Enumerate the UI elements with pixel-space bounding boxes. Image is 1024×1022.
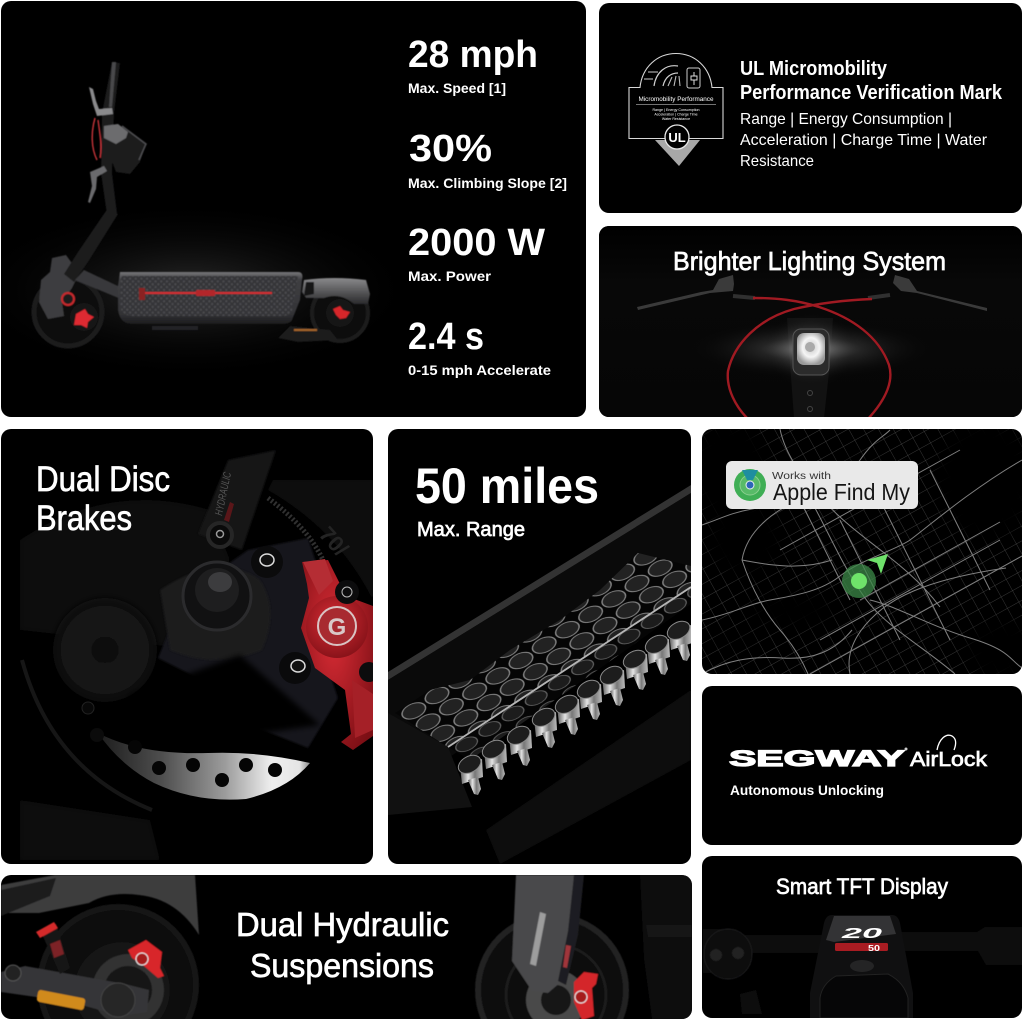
illustration: caliper mount xyxy=(158,538,338,748)
heading: smart TFT display: Smart TFT Display xyxy=(776,874,948,899)
illustration: side view of scooter xyxy=(34,62,370,346)
illustration: disc rotor xyxy=(82,702,310,800)
panel: dual disc brakes: HYDRAULIC xyxy=(213,471,234,517)
illustration: dark shadow over rotor xyxy=(189,654,318,733)
heading: dual disc brakes xyxy=(36,460,170,538)
heading: UL Micromobility: Performance Verification Mark xyxy=(740,82,1003,104)
heading: dual hydraulic suspensions xyxy=(236,906,449,984)
heading: dual hydraulic suspensions: Suspensions xyxy=(250,947,434,984)
front fork xyxy=(39,255,79,319)
badge: works with Apple Find My xyxy=(726,461,918,509)
logo: SEGWAY AirLock: SEGWAY xyxy=(729,746,906,771)
panel: battery range xyxy=(388,429,693,864)
rear wheel xyxy=(312,285,368,341)
panel: dual disc brakes xyxy=(1,429,379,864)
deck underside xyxy=(152,326,198,330)
text: autonomous unlocking: Autonomous Unlocking xyxy=(730,782,884,798)
icon: Find My xyxy=(734,469,766,501)
illustration: red range bar xyxy=(835,943,888,953)
heading: UL Micromobility xyxy=(740,58,1003,104)
icon: direction arrow xyxy=(867,554,888,574)
brake levers xyxy=(89,87,113,116)
heading: dual disc brakes: Brakes xyxy=(36,499,132,538)
illustration: tyre xyxy=(268,480,373,600)
text: verified metrics xyxy=(740,111,988,170)
illustration: bolts xyxy=(251,546,311,684)
illustration: speed readout: 20 xyxy=(840,925,884,942)
illustration: background swingarm xyxy=(20,500,230,650)
illustration: battery cells middle row xyxy=(448,588,691,760)
basket bracket xyxy=(112,128,146,174)
icon: UL badge: Water Resistance xyxy=(662,117,690,121)
illustration: red brake cables xyxy=(728,298,890,420)
stat: acceleration: 0-15 mph Accelerate xyxy=(408,362,551,378)
illustration: light glow xyxy=(728,330,894,368)
heading: brighter lighting system: Brighter Lighting System xyxy=(673,246,946,276)
illustration: front row of cells xyxy=(455,618,693,795)
illustration: battery cells upper rows xyxy=(395,553,691,747)
heading: 50 miles range: 50 miles xyxy=(415,458,599,514)
icon: UL badge: Micromobility Performance xyxy=(638,96,714,103)
red deck line xyxy=(143,292,272,294)
logo: SEGWAY AirLock: AirLock xyxy=(910,749,988,771)
front wheel xyxy=(34,278,102,346)
illustration: red range bar: 50 xyxy=(868,944,881,953)
illustration: fork leg xyxy=(198,450,276,550)
illustration: disc outer arc xyxy=(22,660,152,810)
stat: climbing slope: Max. Climbing Slope [2] xyxy=(408,175,567,191)
panel: dual disc brakes: 70/ xyxy=(314,522,353,561)
stem upper xyxy=(101,62,120,215)
panel: Apple Find My map xyxy=(690,420,1024,680)
logo: SEGWAY AirLock xyxy=(729,735,988,771)
panel: brighter lighting xyxy=(599,226,1022,420)
illustration: rear wheel xyxy=(1,875,199,1022)
illustration: brake levers xyxy=(637,275,987,311)
heading: 50 miles range xyxy=(415,458,599,541)
text: verified metrics: Acceleration | Charge Time | Water xyxy=(740,132,988,149)
stat: max speed: 28 mph xyxy=(408,34,538,76)
panel: UL verification mark xyxy=(599,3,1022,213)
illustration: axle nut xyxy=(183,562,251,630)
illustration: front wheel xyxy=(478,875,692,1022)
heading: UL Micromobility: UL Micromobility xyxy=(740,58,888,80)
icon: UL badge: Acceleration | Charge Time xyxy=(654,112,698,116)
panel: smart TFT display xyxy=(702,856,1022,1018)
illustration: metal bar xyxy=(448,587,691,747)
illustration: red caliper xyxy=(301,559,379,750)
text: verified metrics: Resistance xyxy=(740,153,814,170)
text: verified metrics: Range | Energy Consumption | xyxy=(740,111,952,128)
illustration: hub xyxy=(53,598,157,702)
panel: Segway AirLock xyxy=(702,686,1022,845)
rear fender xyxy=(302,278,370,304)
stat: climbing slope: 30% xyxy=(409,128,492,170)
panel: dual hydraulic suspensions xyxy=(1,875,692,1022)
stat: climbing slope xyxy=(408,128,567,191)
deck xyxy=(118,272,302,324)
stat: max power: Max. Power xyxy=(408,268,492,284)
heading: dual disc brakes: Dual Disc xyxy=(36,460,170,499)
stat: acceleration xyxy=(408,316,551,378)
stat: acceleration: 2.4 s xyxy=(408,316,484,358)
icon: location pin xyxy=(842,564,876,598)
stat: max power: 2000 W xyxy=(408,222,545,264)
illustration: display head xyxy=(810,915,913,1018)
stem lower xyxy=(64,208,118,282)
illustration: stem xyxy=(787,318,833,418)
icon: UL badge: Range | Energy Consumption xyxy=(652,108,700,112)
stat: max speed xyxy=(408,34,538,96)
stat: max speed: Max. Speed [1] xyxy=(408,80,506,96)
heading: dual hydraulic suspensions: Dual Hydraulic xyxy=(236,906,449,943)
illustration: battery casing xyxy=(388,485,691,864)
brake cables xyxy=(92,118,101,160)
icon: UL badge xyxy=(629,54,723,166)
panel: scooter and key specs xyxy=(0,1,586,417)
illustration: handlebar xyxy=(703,927,1022,1014)
heading: 50 miles range: Max. Range xyxy=(417,519,525,541)
illustration: red caliper: G xyxy=(328,614,346,641)
stat: max power xyxy=(408,222,545,284)
icon: UL badge: UL xyxy=(668,130,686,145)
illustration: street map xyxy=(690,420,1024,680)
badge: works with Apple Find My: Apple Find My xyxy=(773,479,910,505)
badge: works with Apple Find My: Works with xyxy=(772,470,831,482)
illustration: headlight xyxy=(793,329,829,375)
